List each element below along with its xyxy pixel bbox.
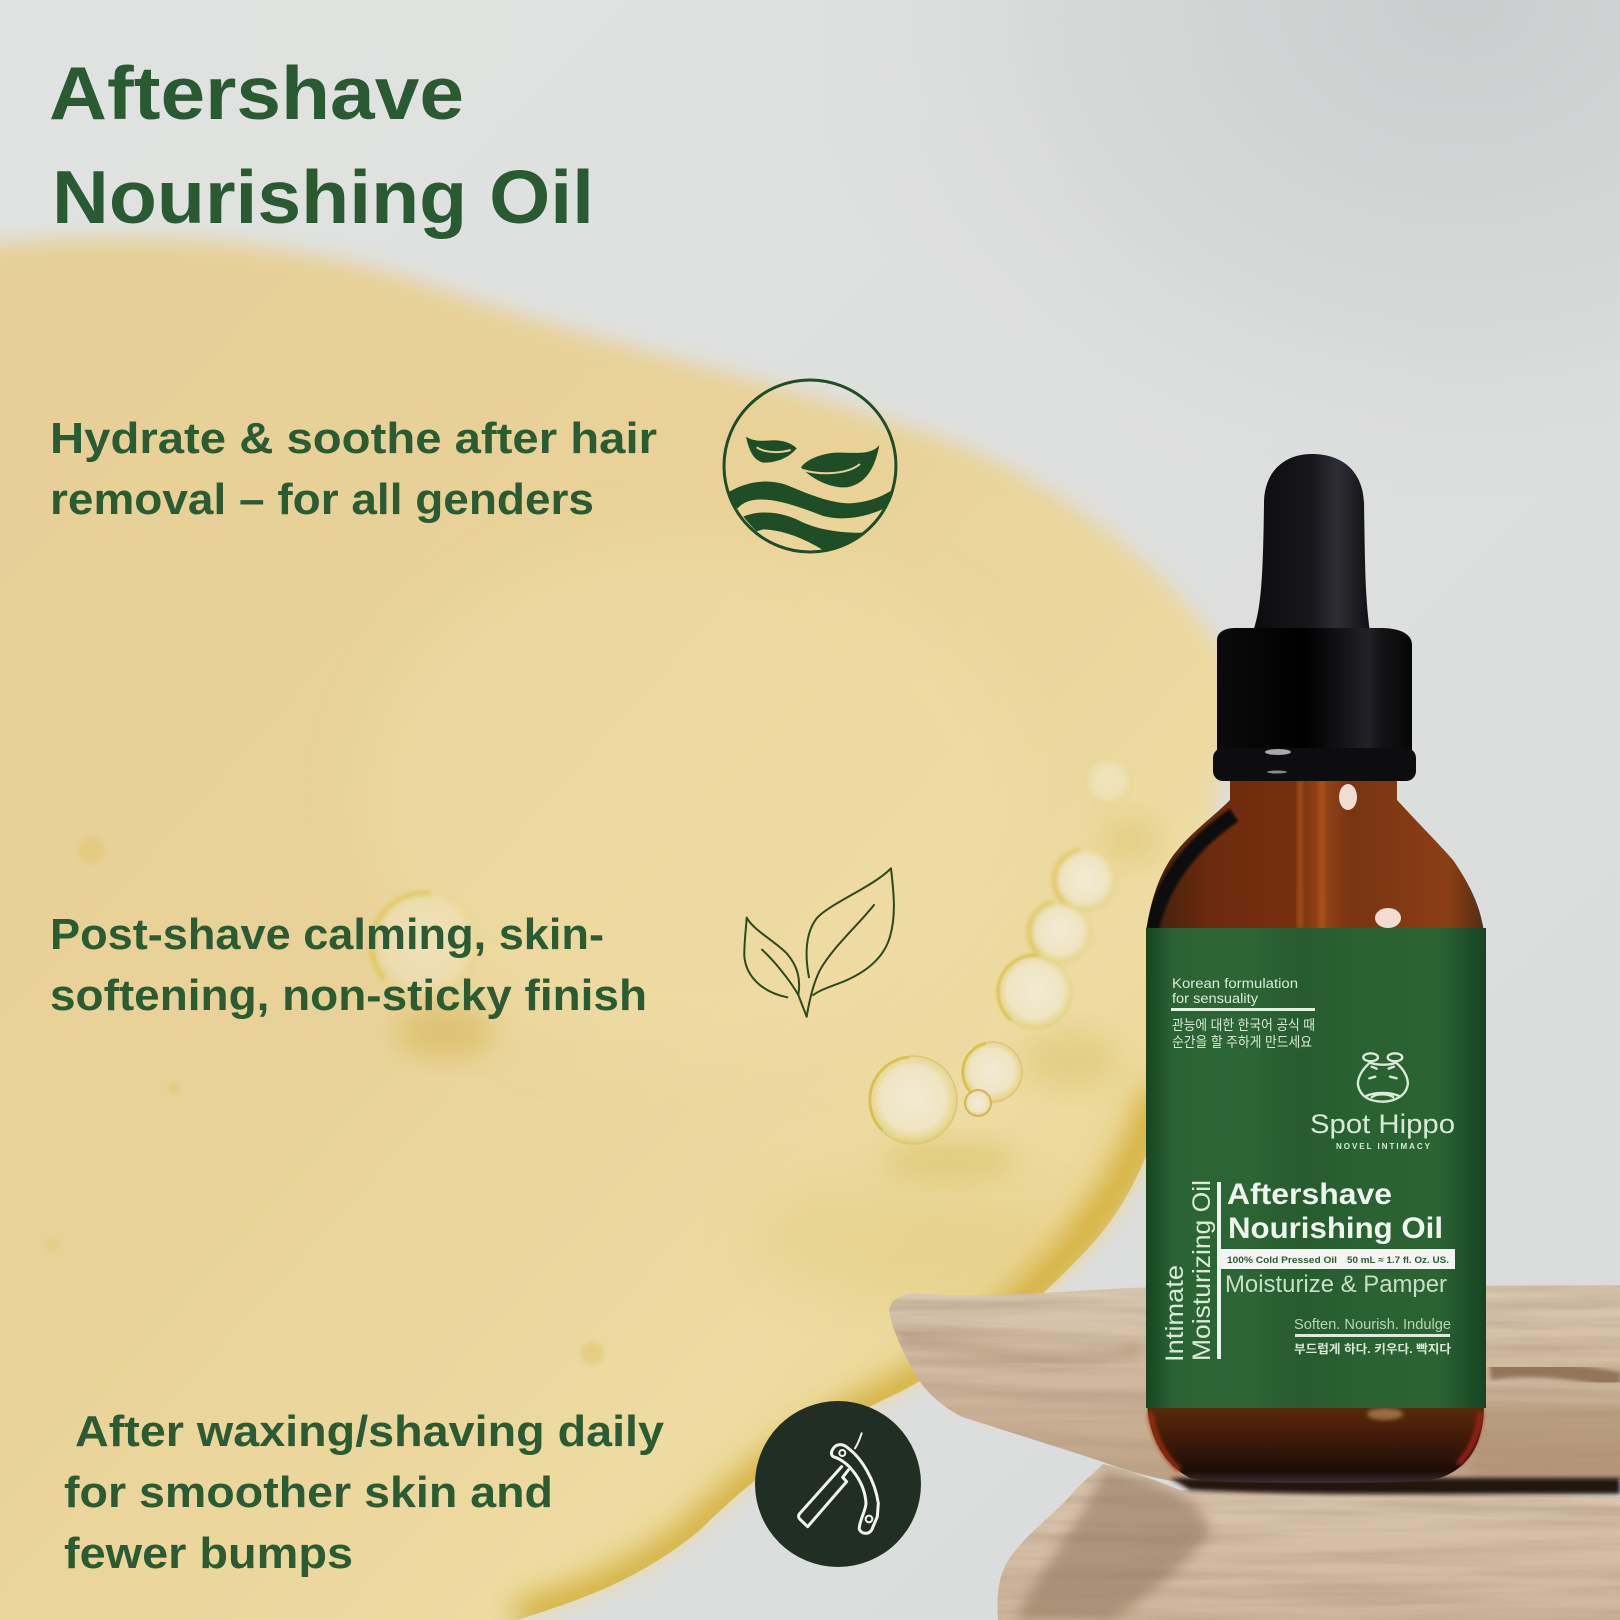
text: calming benefit: softening, non-sticky finish [50,971,647,1020]
product name on label: Nourishing Oil [1228,1212,1443,1245]
green label [1146,928,1486,1408]
icon: leaf outline [744,868,894,1017]
product name on label: Aftershave [1227,1178,1392,1211]
dropper bulb [1253,454,1370,632]
icon: leaves over waves [724,380,896,552]
tagline: Moisturize & Pamper [1225,1271,1447,1298]
upper wood slab [880,1280,1620,1485]
title [49,51,594,239]
text: hydrate benefit: removal – for all genders [50,475,594,524]
title: Nourishing Oil [52,155,594,239]
oil bubbles [45,758,1160,1365]
Korean formulation note: 순간을 할 주하게 만드세요 [1172,1034,1312,1050]
text: calming benefit [50,910,647,1020]
bottom glass [1147,1405,1484,1483]
brand name [1310,1109,1455,1151]
Korean formulation note: for sensuality [1172,991,1258,1006]
text: hydrate benefit: Hydrate & soothe after hair [50,414,657,463]
neck ring [1213,748,1416,781]
benefits note: Soften. Nourish. Indulge [1294,1317,1451,1333]
icon: straight razor badge [755,1401,921,1567]
Korean formulation note [1171,976,1315,1050]
white spec bar: 100% Cold Pressed Oil [1227,1255,1337,1266]
text: calming benefit: Post-shave calming, skin- [50,910,604,959]
text: daily use benefit: fewer bumps [64,1529,353,1578]
vertical side text: Intimate [1161,1265,1189,1362]
brand name: NOVEL INTIMACY [1336,1142,1431,1151]
glass shoulders and neck [1146,781,1484,928]
title: Aftershave [49,51,464,135]
wooden stand [880,1280,1620,1620]
icon: hippo logo [1358,1053,1408,1102]
shadow between slabs [1170,1478,1620,1494]
white spec bar [1219,1249,1455,1269]
oil smear [0,238,1240,1620]
text: daily use benefit: for smoother skin and [64,1468,553,1517]
white spec bar: 50 mL ≈ 1.7 fl. Oz. US. [1347,1255,1449,1266]
vertical side text [1161,1180,1221,1362]
Korean formulation note: 관능에 대한 한국어 공식 때 [1172,1017,1315,1033]
brand name: Spot Hippo [1310,1109,1455,1139]
lower wood slab [990,1460,1620,1620]
dropper collar [1217,628,1412,750]
Korean formulation note: Korean formulation [1172,976,1298,991]
benefits note [1294,1317,1451,1356]
text: daily use benefit [64,1407,665,1578]
product name on label [1227,1178,1443,1245]
text: hydrate benefit [50,414,657,524]
text: daily use benefit: After waxing/shaving daily [75,1407,665,1456]
benefits note: 부드럽게 하다. 키우다. 빡지다 [1294,1341,1451,1356]
vertical side text: Moisturizing Oil [1188,1180,1216,1361]
product bottle [1140,454,1490,1483]
